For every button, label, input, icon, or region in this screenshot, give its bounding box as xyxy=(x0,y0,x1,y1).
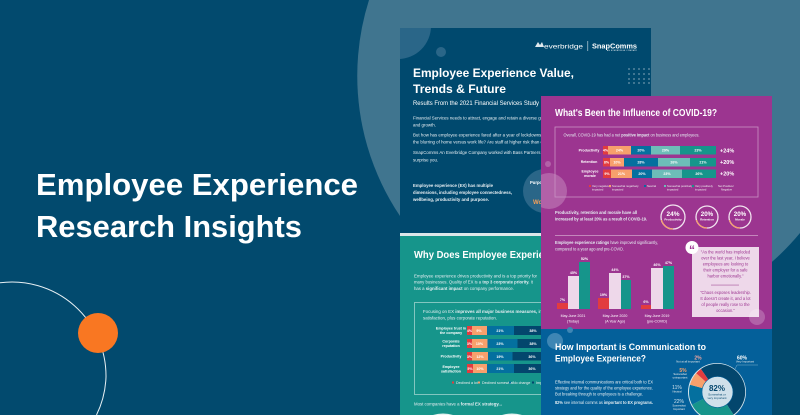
back infographic document xyxy=(400,28,651,415)
influence summary text xyxy=(555,210,647,222)
legend: impacted xyxy=(695,188,707,192)
bar values: 23% xyxy=(496,342,504,346)
quote box: of people really rose to the xyxy=(701,302,750,307)
purpose circle: Wo xyxy=(533,200,543,206)
donut labels: 11% xyxy=(672,385,682,391)
row labels: morale xyxy=(584,174,596,178)
teal box with bars: Focusing on EX improves all major business measures, including xyxy=(423,309,556,314)
donut labels: Important xyxy=(673,407,685,411)
row labels: Productivity xyxy=(579,148,599,152)
blue decorative circles xyxy=(547,327,573,349)
purple decorative circles xyxy=(541,161,567,209)
net change values: +20% xyxy=(720,160,734,166)
blue heading: How Important is Communication to xyxy=(555,342,706,353)
bar values: 10% xyxy=(613,160,621,164)
influence summary text: Productivity, retention and morale have all xyxy=(555,210,637,215)
row labels: the company xyxy=(440,331,462,335)
bar values: 5% xyxy=(467,367,473,371)
blue text: strategy and for the quality of the employee experience. xyxy=(555,386,653,390)
legend: Negative xyxy=(721,188,732,192)
bar values: 9% xyxy=(604,172,610,176)
dimensions text: Employee experience (EX) has multiple xyxy=(413,183,494,188)
panel: navy intro xyxy=(400,28,651,233)
intro text: surprise you. xyxy=(413,158,438,162)
row labels xyxy=(436,326,466,374)
bar values: 21% xyxy=(618,172,626,176)
legend: Somewhat positively xyxy=(667,184,693,188)
bar values: 3% xyxy=(467,355,473,359)
bar values: 9% xyxy=(476,329,482,333)
panel: teal why does EX matter xyxy=(400,236,541,415)
ratings column chart: May-June 2020 xyxy=(603,314,627,318)
donut chart: very important xyxy=(707,396,727,400)
bar values: 24% xyxy=(616,148,624,152)
legend: No change xyxy=(513,381,530,385)
donut labels: 2% xyxy=(694,356,702,362)
logos: AN EVERBRIDGE COMPANY xyxy=(607,49,638,52)
legend: Net Positive/ xyxy=(718,184,734,188)
row labels: Employee xyxy=(443,365,459,369)
bar values xyxy=(467,329,537,371)
intro text: the blurring of home versus work life? Are staff at higher risk than ever? xyxy=(413,140,552,144)
intro text: SnapComms An Everbridge Company worked with Bass Partners to find out xyxy=(413,150,562,155)
bar values: 20% xyxy=(638,172,646,176)
logos xyxy=(535,41,638,52)
bar values: 29% xyxy=(662,148,670,152)
bar values: 38% xyxy=(529,329,537,333)
intro text: But how has employee experience fared after a year of lockdowns, remote work and xyxy=(413,132,577,138)
stat ring: retention: Retention xyxy=(700,218,714,222)
bar values: 20% xyxy=(637,148,645,152)
purpose circle: Purpose xyxy=(530,180,547,185)
bar values: 23% xyxy=(663,172,671,176)
legend: Declined a lot xyxy=(456,381,478,385)
dimensions text: wellbeing, productivity and purpose. xyxy=(412,197,489,202)
bar values: 26% xyxy=(670,160,678,164)
ratings column chart: (Today) xyxy=(567,320,579,324)
ratings column chart: (pre-COVID) xyxy=(647,320,667,324)
legend: Very negatively xyxy=(592,184,612,188)
teal text: has a significant impact on company performance. xyxy=(414,286,514,291)
COVID chart box xyxy=(555,127,758,197)
stat ring: morale: 20% xyxy=(734,211,747,218)
intro text xyxy=(413,116,541,162)
teal footer text: Most companies have a formal EX strategy... xyxy=(414,402,502,406)
bar values: 28% xyxy=(637,160,645,164)
ratings text: compared to a year ago and pre-COVID. xyxy=(555,246,624,252)
legend: Very positively xyxy=(695,184,713,188)
ratings column chart: 6% xyxy=(643,300,649,304)
legend: impacted xyxy=(592,188,604,192)
ratings column chart: 52% xyxy=(581,257,589,261)
ratings column chart: 19% xyxy=(600,293,608,297)
donut chart: 82% xyxy=(709,384,725,393)
teal box with bars: satisfaction, plus corporate reputation. xyxy=(423,316,497,320)
stat ring: morale xyxy=(729,206,751,228)
legend: Somewhat negatively xyxy=(612,184,639,188)
stat ring: morale: Morale xyxy=(735,218,745,222)
legend: Improved xyxy=(536,381,551,385)
bar values: 4% xyxy=(467,329,473,333)
row labels xyxy=(579,148,599,178)
teal box with bars xyxy=(414,302,541,395)
blue text: 82% see internal comms as important to EX programs. xyxy=(555,400,653,405)
net change values: +20% xyxy=(720,172,734,178)
row labels: satisfaction xyxy=(441,370,461,374)
donut labels xyxy=(672,356,758,411)
purple heading: What's Been the Influence of COVID-19? xyxy=(555,108,717,119)
bar values: 21% xyxy=(699,160,707,164)
bar values: 36% xyxy=(528,355,536,359)
quote box: It doesn't create it, and a lot xyxy=(700,296,751,301)
bar values: 23% xyxy=(694,148,702,152)
legend: impacted xyxy=(667,188,679,192)
panel: purple COVID influence xyxy=(531,96,772,329)
white stat ovals xyxy=(433,414,522,415)
donut labels: Very Important xyxy=(736,360,754,364)
stacked bars xyxy=(467,326,541,373)
row labels: Productivity xyxy=(441,354,461,358)
quote box: over the last year, I believe xyxy=(701,256,751,260)
logos: everbridge xyxy=(544,44,583,50)
quote box: "As the world has imploded xyxy=(701,250,751,254)
bar values: 21% xyxy=(496,367,504,371)
legend xyxy=(452,382,541,385)
teal heading: Why Does Employee Experience Matter? xyxy=(414,250,597,261)
bar values: 38% xyxy=(529,342,537,346)
ratings column chart: (A Year Ago) xyxy=(605,320,625,324)
bar values: 19% xyxy=(496,355,504,359)
ratings column chart: May-June 2019 xyxy=(645,314,669,318)
bar values: 10% xyxy=(476,342,484,346)
ratings column chart: May-June 2021 xyxy=(561,314,585,318)
teal text xyxy=(414,274,538,291)
blue text: Effective internal communications are critical both to EX xyxy=(555,380,653,384)
dimensions text xyxy=(412,183,512,202)
bar values: 4% xyxy=(603,148,609,152)
white divider xyxy=(400,233,541,236)
row labels: Corporate xyxy=(442,340,460,344)
donut chart xyxy=(688,363,746,415)
quote box: occasion." xyxy=(716,308,735,313)
blue text xyxy=(555,380,653,405)
row labels: Retention xyxy=(581,160,597,164)
ratings column chart: 47% xyxy=(665,261,673,265)
blue text: But breaking through to employees is a challenge. xyxy=(555,392,643,396)
legend: Neutral xyxy=(647,184,656,188)
stat ring: productivity: Productivity xyxy=(664,218,682,222)
blue heading: Employee Experience? xyxy=(555,354,646,364)
donut labels: 22% xyxy=(674,399,685,405)
quote box: their employer for a safe xyxy=(703,268,748,272)
legend xyxy=(589,185,734,191)
bar values: 21% xyxy=(496,329,504,333)
net change values xyxy=(720,148,734,178)
teal text: Employee experience drives productivity and is a top priority for xyxy=(414,274,538,278)
net change values: +24% xyxy=(720,148,734,154)
main title xyxy=(36,168,358,244)
donut labels: 60% xyxy=(737,356,748,362)
legend: impacted xyxy=(612,188,624,192)
ratings column chart: 45% xyxy=(570,271,578,275)
bar values: 8% xyxy=(604,160,610,164)
ratings text xyxy=(555,240,658,252)
quote box: harbor emotionally." xyxy=(708,274,744,278)
ratings column chart: 7% xyxy=(560,298,566,302)
main title: Research Insights xyxy=(36,210,302,244)
bar values: 36% xyxy=(528,367,536,371)
main title: Employee Experience xyxy=(36,168,358,202)
panel: blue communication xyxy=(541,327,772,415)
intro text: Financial Services needs to attract, engage and retain a diverse group of talent xyxy=(413,116,567,120)
icon: quote mark xyxy=(686,241,698,254)
stacked bars xyxy=(603,146,716,178)
donut labels: Not at all important xyxy=(676,360,700,364)
donut chart: Somewhat or xyxy=(708,392,726,396)
donut labels: unimportant xyxy=(673,376,688,380)
legend: Declined somewhat xyxy=(482,381,513,385)
bar values xyxy=(603,148,707,176)
document title: Employee Experience Value, xyxy=(413,68,574,80)
bar values: 10% xyxy=(476,367,484,371)
quote box: "Chaos exposes leadership. xyxy=(700,290,751,295)
icon: quote mark: “ xyxy=(689,243,695,257)
subtitle: Results From the 2021 Financial Services Study xyxy=(413,100,540,107)
quote box xyxy=(692,247,759,317)
stat ring: productivity xyxy=(661,205,685,229)
logos: SnapComms xyxy=(592,42,637,50)
document title: Trends & Future xyxy=(413,84,506,96)
teal text: many businesses. Quality of EX is a top 3 corporate priority. It xyxy=(414,280,534,284)
donut labels: Neutral xyxy=(672,390,682,394)
front infographic document xyxy=(531,96,772,415)
donut labels: Somewhat xyxy=(672,404,686,408)
stat ring: retention: 20% xyxy=(701,211,714,218)
ratings column chart xyxy=(557,257,674,324)
bar values: 3% xyxy=(467,342,473,346)
stat ring: productivity: 24% xyxy=(666,211,680,218)
intro text: and growth. xyxy=(413,122,436,128)
COVID chart box: Overall, COVID-19 has had a net positive impact on business and employees. xyxy=(564,132,700,138)
donut labels: 5% xyxy=(679,368,687,374)
ratings text: Employee experience ratings have improved significantly, xyxy=(555,240,658,245)
bar values: 26% xyxy=(695,172,703,176)
ratings column chart: 46% xyxy=(653,263,661,267)
stat ring: retention xyxy=(696,206,718,228)
background large circle xyxy=(357,0,800,324)
row labels: Employee xyxy=(582,170,598,174)
influence summary text: increased by at least 20% as a result of COVID-19. xyxy=(555,216,647,222)
row labels: Employee trust in xyxy=(436,326,466,330)
quote box: employees are looking to xyxy=(703,262,749,266)
row labels: reputation xyxy=(442,344,460,348)
purpose circle xyxy=(523,169,541,212)
quote decorative circle xyxy=(749,309,765,325)
document title xyxy=(413,68,574,93)
decorative circle outline with orange dot xyxy=(0,282,118,415)
blue heading xyxy=(555,342,706,364)
dimensions text: dimensions, including employee connectedness, xyxy=(413,190,512,195)
bar values: 12% xyxy=(476,355,484,359)
ratings column chart: 37% xyxy=(622,275,630,279)
donut labels: Somewhat xyxy=(673,372,687,376)
dots pattern xyxy=(628,68,650,84)
ratings column chart: 44% xyxy=(611,268,619,272)
